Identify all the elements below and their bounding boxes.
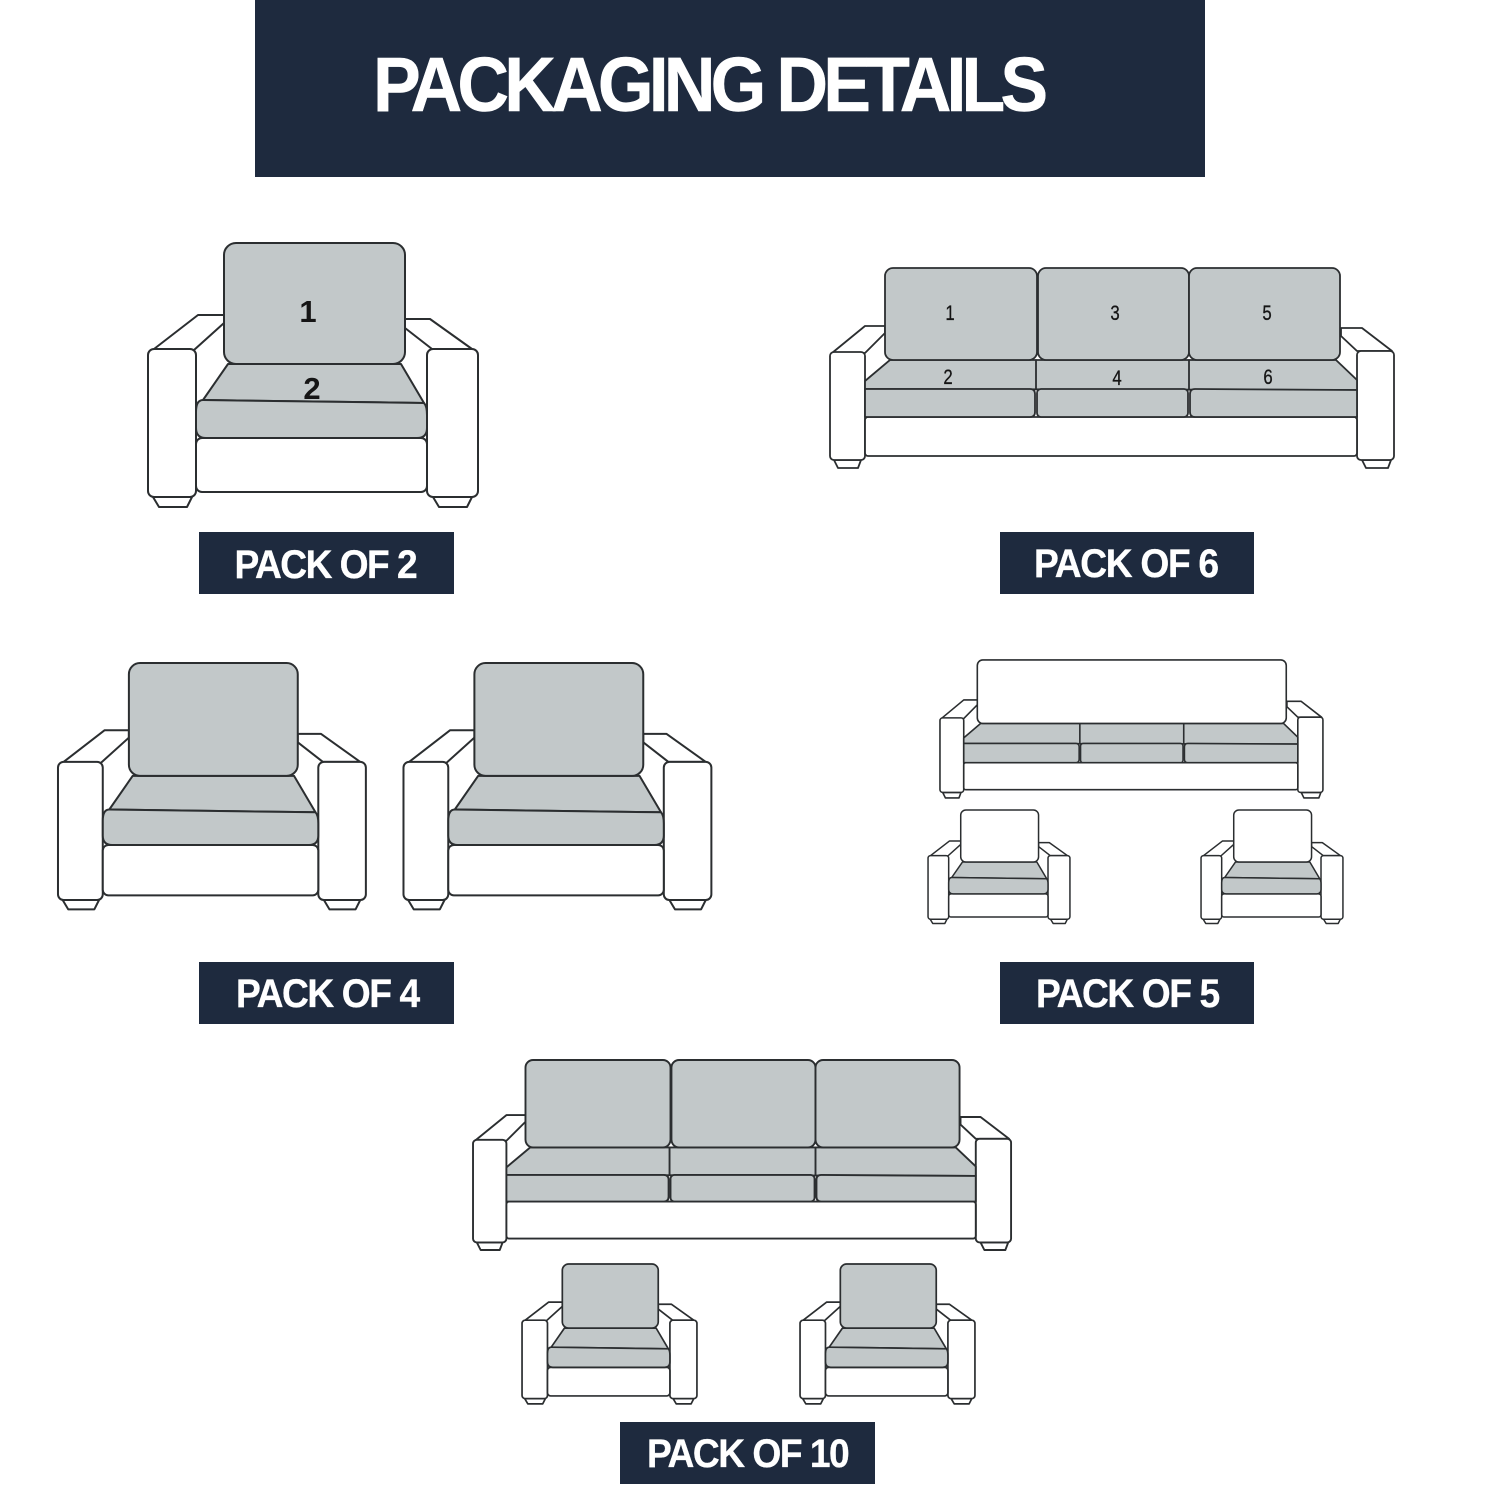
cushion numbers: 1 — [945, 302, 955, 326]
panel: pack of 10 — [473, 1060, 1011, 1484]
label: pack of 6: PACK OF 6 — [1034, 542, 1219, 586]
illustration: left armchair — [58, 663, 366, 909]
panel: pack of 6 — [830, 268, 1394, 594]
label: pack of 4 — [199, 962, 454, 1024]
label: pack of 6 — [1000, 532, 1254, 594]
illustration: right armchair — [403, 663, 711, 909]
cushion numbers: 4 — [1112, 367, 1122, 391]
illustration: small left armchair — [928, 810, 1070, 924]
panel: pack of 5 — [928, 660, 1343, 1024]
label: pack of 10 — [620, 1422, 875, 1484]
title: PACKAGING DETAILS — [373, 42, 1048, 128]
cushion number 2: 2 — [303, 371, 321, 406]
cushion numbers: 5 — [1262, 302, 1272, 326]
label: pack of 5: PACK OF 5 — [1036, 972, 1220, 1016]
illustration: three seater sofa with numbered cushions — [830, 268, 1394, 468]
illustration: sofa with white back — [940, 660, 1323, 798]
label: pack of 10: PACK OF 10 — [647, 1432, 850, 1476]
illustration: three seater sofa — [473, 1060, 1011, 1250]
illustration: small right armchair — [1201, 810, 1343, 924]
cushion number 1: 1 — [299, 294, 317, 329]
label: pack of 5 — [1000, 962, 1254, 1024]
panel: pack of 2 — [148, 243, 478, 594]
title banner — [255, 0, 1205, 177]
cushion numbers: 2 — [943, 366, 953, 390]
illustration: small right armchair — [800, 1264, 975, 1404]
panel: pack of 4 — [58, 663, 711, 1024]
label: pack of 4: PACK OF 4 — [236, 972, 421, 1016]
illustration: armchair with numbered cushions — [148, 243, 478, 507]
cushion numbers — [943, 302, 1273, 391]
cushion numbers: 6 — [1263, 366, 1273, 390]
label: pack of 2: PACK OF 2 — [234, 543, 418, 587]
illustration: small left armchair — [522, 1264, 697, 1404]
cushion numbers: 3 — [1110, 302, 1120, 326]
label: pack of 2 — [199, 532, 454, 594]
